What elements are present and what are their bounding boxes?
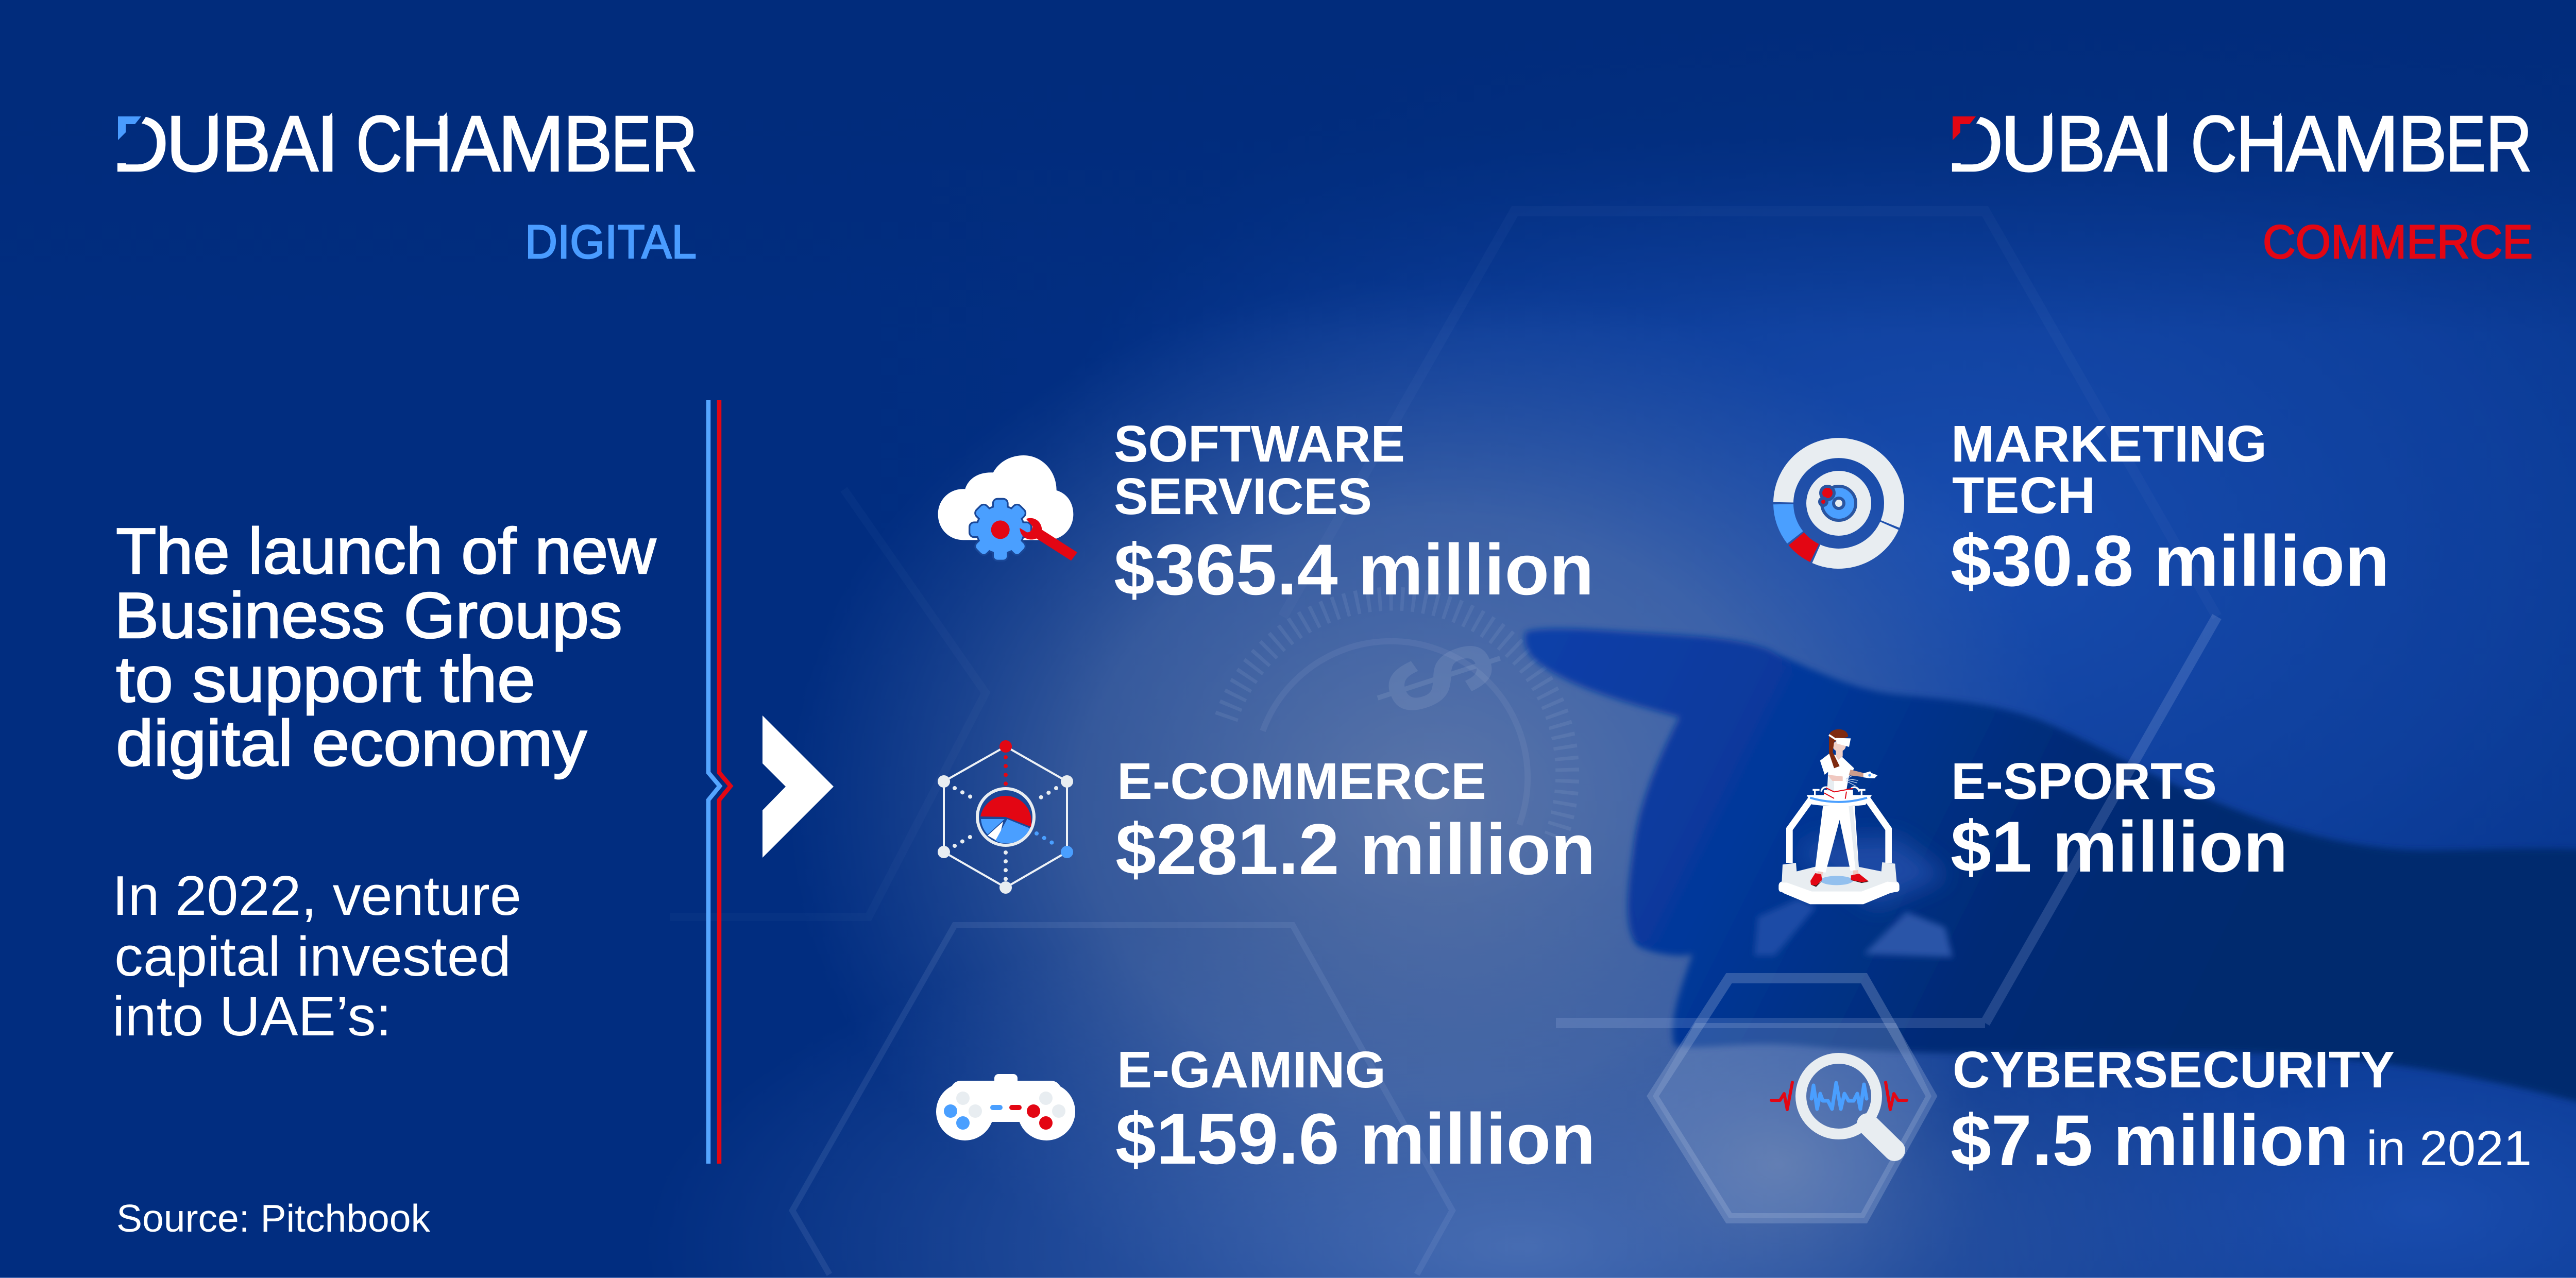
logo wordmark: C bbox=[356, 99, 402, 188]
intro text bbox=[112, 864, 521, 1048]
intro text: into UAE’s: bbox=[112, 985, 392, 1048]
headline text bbox=[114, 515, 656, 779]
item: cybersecurity bbox=[1771, 1041, 2532, 1181]
value: $281.2 million bbox=[1115, 809, 1596, 890]
logo wordmark: R bbox=[2486, 99, 2532, 188]
logo wordmark: B bbox=[222, 99, 271, 188]
logo wordmark: M bbox=[2332, 99, 2399, 188]
source note: Source: Pitchbook bbox=[116, 1197, 430, 1240]
logo wordmark bbox=[1946, 99, 2532, 188]
label: E-SPORTS bbox=[1951, 753, 2217, 810]
background: pointing hand bbox=[1524, 628, 2576, 1120]
icon: hexagon network with pie bbox=[938, 740, 1073, 894]
label: MARKETING bbox=[1951, 415, 2267, 473]
logo: Dubai Chamber Commerce bbox=[1946, 99, 2533, 268]
icon: cloud with gear and wrench bbox=[938, 455, 1077, 560]
logo label: commerce: COMMERCE bbox=[2263, 216, 2533, 268]
item: e-commerce bbox=[938, 740, 1596, 894]
logo wordmark: A bbox=[451, 99, 500, 188]
value: $365.4 million bbox=[1114, 529, 1594, 610]
label bbox=[1951, 415, 2267, 524]
label: E-COMMERCE bbox=[1117, 753, 1486, 810]
logo wordmark: A bbox=[269, 99, 318, 188]
logo wordmark bbox=[111, 99, 698, 188]
background hexagons bbox=[670, 211, 2217, 1274]
logo wordmark: I bbox=[2150, 99, 2174, 188]
year note: in 2021 bbox=[2366, 1121, 2532, 1176]
logo wordmark: H bbox=[401, 99, 453, 188]
logo wordmark: D bbox=[111, 99, 169, 188]
label bbox=[1114, 415, 1405, 525]
logo label: digital: DIGITAL bbox=[525, 216, 697, 268]
label: SERVICES bbox=[1114, 468, 1372, 525]
background dollar gauge bbox=[1226, 599, 1567, 838]
intro text: In 2022, venture bbox=[112, 864, 521, 927]
logo wordmark: B bbox=[563, 99, 613, 188]
item: software services bbox=[938, 415, 1594, 610]
icon: game controller bbox=[936, 1074, 1075, 1140]
logo wordmark: U bbox=[2001, 99, 2058, 188]
item: e-sports bbox=[1778, 729, 2288, 904]
item: e-gaming bbox=[936, 1041, 1596, 1179]
label: TECH bbox=[1952, 467, 2095, 524]
logo wordmark: B bbox=[2056, 99, 2106, 188]
value: $7.5 million bbox=[1951, 1100, 2349, 1181]
label: CYBERSECURITY bbox=[1953, 1041, 2395, 1099]
value: $30.8 million bbox=[1951, 520, 2389, 601]
arrow bbox=[762, 715, 834, 858]
label: SOFTWARE bbox=[1114, 415, 1405, 473]
logo wordmark: E bbox=[611, 99, 651, 188]
logo: Dubai Chamber Digital bbox=[117, 112, 696, 260]
logo wordmark: U bbox=[166, 99, 223, 188]
background hexagon behind cybersecurity bbox=[1556, 617, 2217, 1218]
logo wordmark: I bbox=[315, 99, 340, 188]
logo wordmark: D bbox=[1946, 99, 2003, 188]
logo wordmark: A bbox=[2286, 99, 2335, 188]
label: E-GAMING bbox=[1117, 1041, 1386, 1099]
logo wordmark: C bbox=[2191, 99, 2237, 188]
icon: target ring bbox=[1784, 448, 1894, 558]
value: $1 million bbox=[1951, 806, 2288, 887]
value: $159.6 million bbox=[1115, 1098, 1596, 1179]
logo wordmark: A bbox=[2104, 99, 2153, 188]
headline text: to support the bbox=[116, 643, 535, 715]
logo wordmark: M bbox=[498, 99, 565, 188]
logo wordmark: R bbox=[651, 99, 698, 188]
headline text: The launch of new bbox=[116, 515, 656, 587]
item: marketing tech bbox=[1784, 415, 2389, 601]
headline text: digital economy bbox=[116, 707, 587, 779]
divider lines bbox=[708, 400, 731, 1164]
logo wordmark: H bbox=[2236, 99, 2287, 188]
logo wordmark: E bbox=[2446, 99, 2486, 188]
icon: VR player on platform bbox=[1778, 729, 1900, 904]
background dollar gauge: $ bbox=[1348, 626, 1532, 729]
intro text: capital invested bbox=[114, 925, 511, 988]
icon: magnifier with waveform bbox=[1771, 1058, 1907, 1150]
logo wordmark: B bbox=[2398, 99, 2447, 188]
headline text: Business Groups bbox=[114, 579, 622, 652]
